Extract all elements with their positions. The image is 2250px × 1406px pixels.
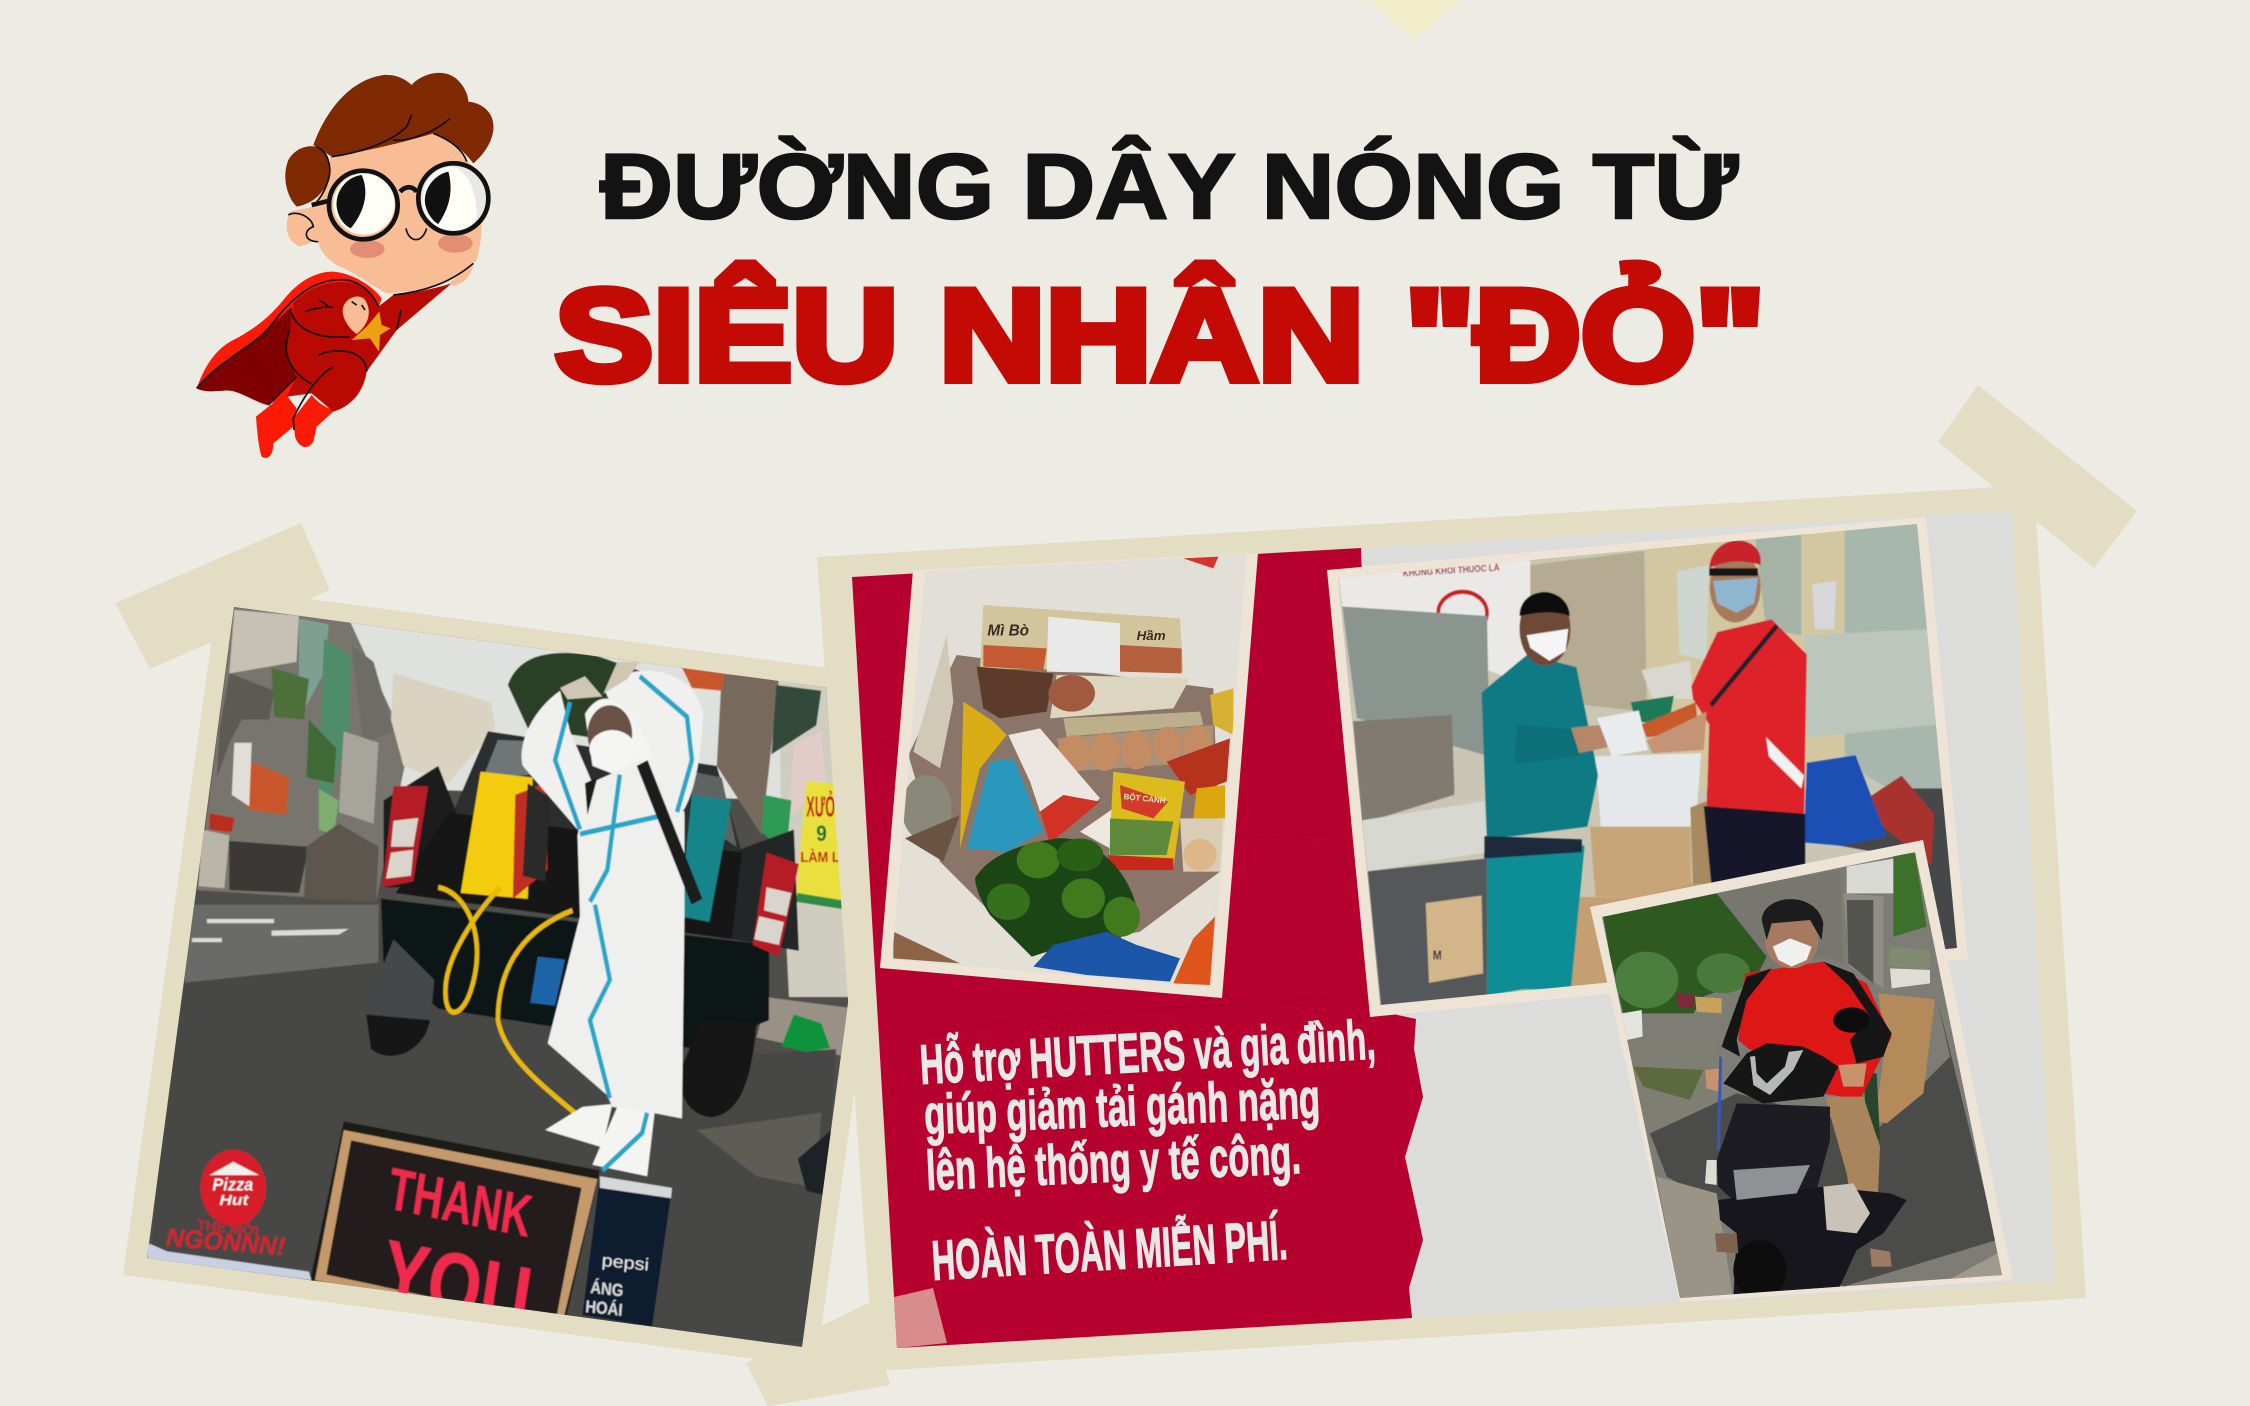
cheeks [350,240,385,258]
shop sign: 9 [816,822,827,846]
pale road patch [697,1113,821,1188]
panel: left photo frame [123,587,912,1367]
photo: handing over medical supplies: KHÔNG KHÓI THUỐC LÁ [1403,561,1500,579]
noodle packs: Hầm [1137,628,1166,643]
photo: handing over medical supplies [1330,515,1970,1015]
limes [975,838,1140,958]
pizza hut logo: NGONNN! [165,1224,286,1262]
glasses and eyes [312,163,488,239]
head [287,133,482,293]
noodle packs: Mì Bò [987,623,1029,640]
pepsi can [582,1176,672,1327]
panel: torn red paper [852,548,1423,1348]
metal chair [1353,715,1454,823]
pizza box: YOU [376,1221,537,1350]
caption text [918,1008,1377,1292]
caption line 3: lên hệ thống y tế công. [925,1122,1302,1202]
red pack [1167,738,1230,795]
sidewalk [757,997,856,1058]
counter floor [1362,801,1487,871]
body [287,282,452,412]
pizza hut logo [165,1150,286,1262]
delivery box [1875,993,1935,1123]
caption line 2: giúp giảm tải gánh nặng [923,1066,1321,1146]
hand [450,263,473,286]
small pack [1180,818,1223,872]
tyres [366,1014,431,1056]
shop sign: LÀM LÁ [800,848,849,865]
soup powder [1108,772,1185,870]
no-smoking wall [1338,559,1530,686]
clutter [1888,947,1930,970]
photo frame: groceries [880,553,1258,998]
man in red [1647,541,1807,890]
orange corner [1173,917,1215,985]
brown packet [977,667,1053,718]
gloves [560,676,602,699]
green bag [781,1014,830,1052]
hanging sign [1847,858,1895,893]
pizza box [309,1121,600,1350]
paper crease [880,740,1400,1040]
plants left [1603,893,1767,1013]
blue tape [555,676,692,1170]
right side storefront [717,673,779,835]
back wall [1647,530,1845,788]
dark asphalt [1650,997,1997,1287]
shop sign [796,780,842,910]
light pavement [1657,1177,1733,1300]
photo: grocery bag [880,550,1260,995]
pickup truck [364,731,799,1117]
pots [1622,1010,1643,1040]
scooter [1705,1007,1907,1300]
rider [1722,899,1892,1237]
photo: handing over medical supplies: M [1433,947,1442,963]
cardboard boxes [1590,827,1691,898]
shop sign: XƯỞ [806,789,836,823]
door [1530,551,1647,712]
caption line 1: Hỗ trợ HUTTERS và gia đình, [918,1008,1377,1096]
pepsi can: pepsi [601,1251,650,1275]
title line 2: SIÊU NHÂN "ĐỎ" [555,262,1765,408]
number plate [530,957,565,1006]
truck tail light left [383,786,428,887]
pizza hut logo: Pizza [212,1176,253,1195]
pillar [1843,893,1883,988]
pizza hut logo: Hut [219,1191,250,1208]
star badge [352,312,391,352]
blue pack [967,758,1043,852]
oil bottle [1210,688,1233,735]
hair [313,73,493,163]
teal tank [679,795,732,922]
bag interior [908,655,1220,955]
background yard [1717,870,1843,973]
dark object [798,1130,831,1196]
tree [508,653,652,737]
glove box [1426,896,1483,983]
can [902,775,952,842]
pizza box: THANK [384,1155,536,1250]
superhero mascot [197,73,493,458]
red tag [1183,557,1218,568]
photo: rider on scooter [1590,840,2020,1310]
egg tray [1057,712,1213,772]
man in teal [1482,592,1609,996]
photo: worker in protective suit [147,607,848,1347]
strap [642,763,697,902]
sticky note corner [1370,0,1461,40]
panel: main photo frame [817,485,2086,1371]
pepsi can: ÁNG [590,1277,624,1301]
title line 1: ĐƯỜNG DÂY NÓNG TỪ [600,135,1739,238]
panel: torn grey paper [852,511,2056,1348]
face [586,704,633,746]
plants right [1893,853,1927,937]
floor shadow [1804,788,1959,954]
yellow hoses [438,887,500,1012]
side packet [913,635,953,768]
pizza hut logo: THẾ MỚI [196,1217,259,1239]
legs [256,393,335,458]
fist [343,297,369,334]
pale blue corner [147,1243,311,1280]
caption line 4: HOÀN TOÀN MIỄN PHÍ. [930,1208,1289,1292]
sky [350,622,802,800]
pepsi can: HOÁI [585,1296,623,1320]
cape [197,272,382,405]
soup powder: BỘT CANH [1123,792,1166,805]
gutter [1628,1037,1723,1133]
noodle packs [980,605,1183,673]
white bag folds [893,838,1037,968]
protective suit [522,662,703,1176]
pink paper patch [894,1288,947,1348]
glass door [1845,522,1959,948]
truck tail light right [753,853,799,957]
photo frame: handover [1327,517,1968,1017]
photo frame: delivery rider [1590,840,2013,1302]
salt bag [1008,728,1100,842]
bags [1641,661,1693,699]
yellow tank [461,772,550,899]
outline strokes [197,115,473,430]
tape: top right [1938,385,2137,568]
tape: top left [115,523,330,669]
yellow sheet [960,702,1007,848]
fire extinguishers [1864,776,1934,865]
road markings [207,919,274,923]
blue bag bottom [1033,932,1180,982]
tape: bottom centre [746,1303,890,1406]
street buildings [197,604,408,902]
blue chair [1804,755,1886,846]
notice board [1342,606,1490,756]
cream building [391,673,495,783]
medical box [1597,710,1648,756]
